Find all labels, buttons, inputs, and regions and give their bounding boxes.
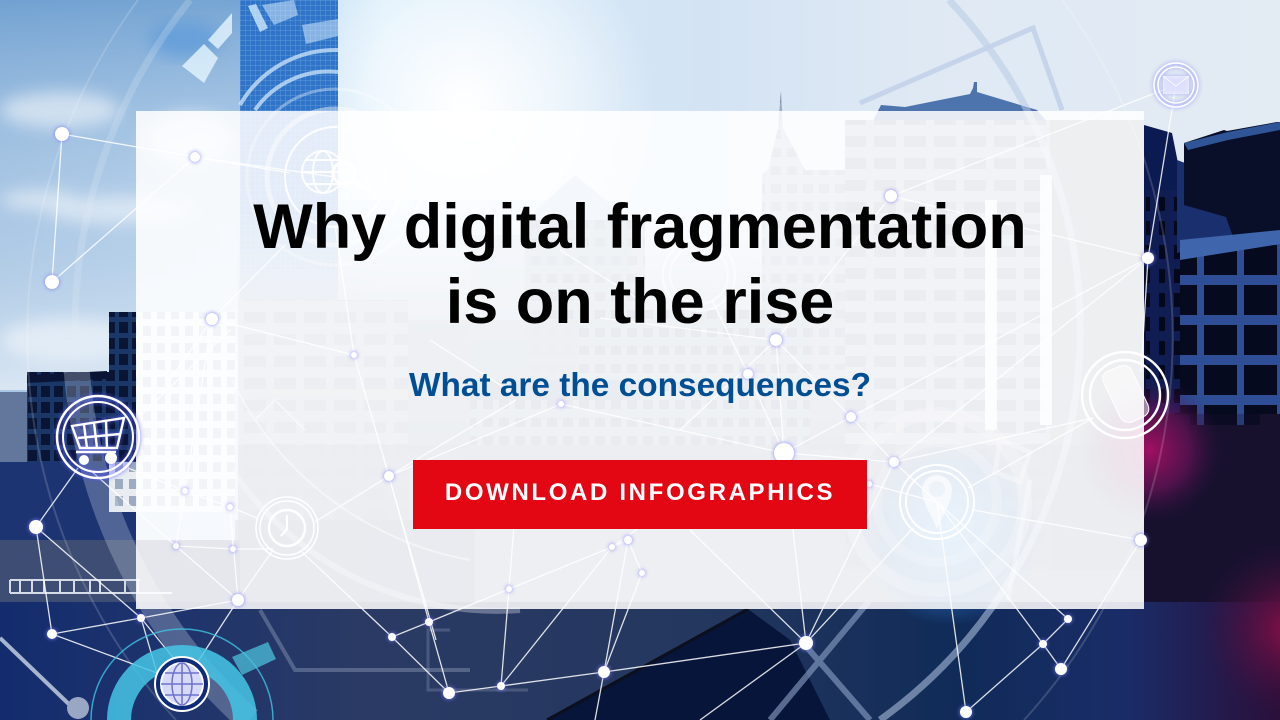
building upper right (871, 82, 1050, 125)
icon: mail (1154, 63, 1198, 107)
HUD arcs on the card (232, 380, 1030, 611)
icon: globe with magnifier (247, 89, 423, 265)
button: download infographics (413, 460, 867, 529)
boat on river (10, 580, 172, 593)
title: Why digital fragmentation (253, 192, 1027, 262)
subtitle: What are the consequences? (409, 367, 871, 404)
icon: clock (256, 497, 318, 559)
river (0, 602, 1280, 720)
icon: taxi car (1082, 352, 1168, 438)
icon: location pin (849, 414, 1025, 590)
title (253, 192, 1027, 337)
title: is on the rise (446, 267, 834, 337)
icon: shopping cart (57, 396, 139, 478)
tall blue tower behind card (240, 0, 338, 330)
button: download infographics: DOWNLOAD INFOGRAPHICS (445, 479, 835, 506)
ghost tone filling the card's middle (238, 210, 1148, 450)
network lines (36, 85, 1176, 720)
icon: person faint (663, 239, 735, 311)
right-hand dark buildings (1144, 122, 1280, 420)
panel: translucent white card (136, 111, 1144, 609)
network nodes (29, 127, 1154, 718)
icon: globe target (91, 629, 276, 720)
ghost city in the centre (525, 175, 630, 320)
left-hand buildings (0, 392, 30, 562)
